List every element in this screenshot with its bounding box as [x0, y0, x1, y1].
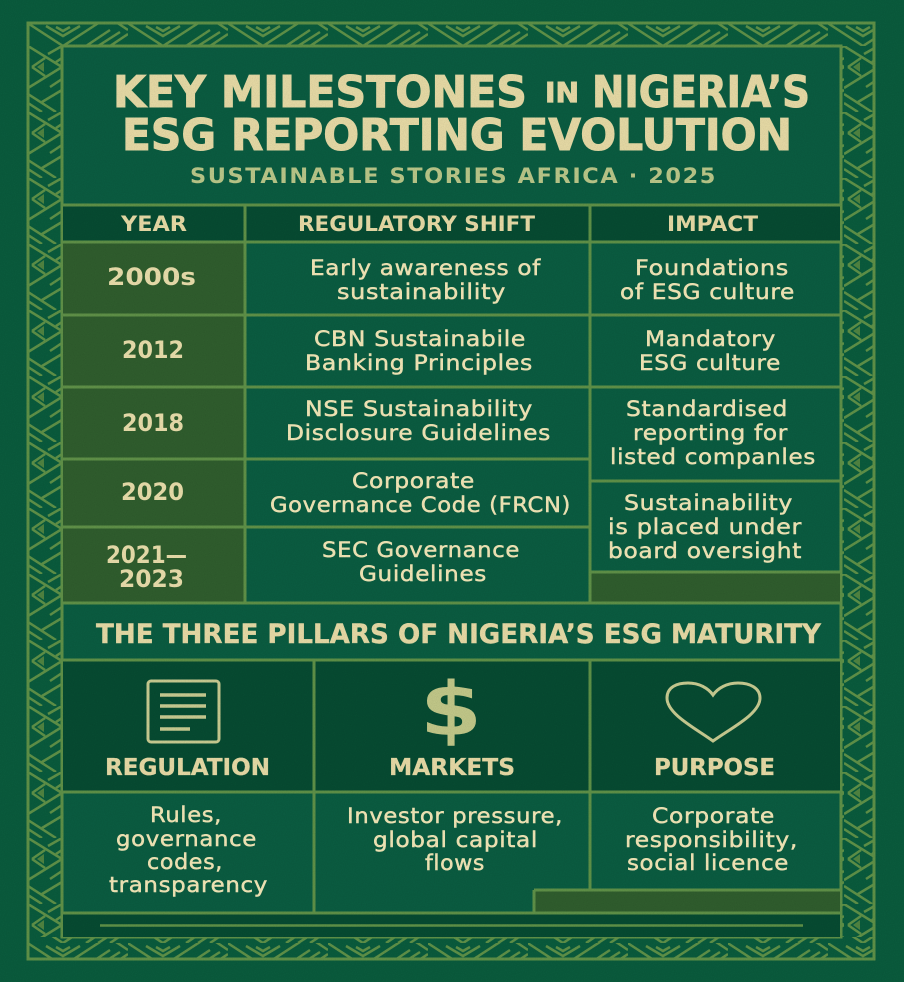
regulatory shift column: Guidelines — [359, 562, 487, 586]
year column cells: 2000s — [107, 263, 196, 291]
regulatory shift column: Disclosure Guidelines — [286, 421, 551, 445]
impact column: listed companles — [610, 445, 816, 469]
regulation description — [109, 803, 268, 897]
title block — [113, 67, 810, 188]
markets description: flows — [425, 851, 485, 875]
regulatory shift column: Governance Code (FRCN) — [270, 493, 571, 517]
section heading: three pillars: THE THREE PILLARS OF NIGERIA’S ESG MATURITY — [96, 619, 821, 650]
regulation label: REGULATION — [105, 755, 270, 781]
table header row — [63, 206, 840, 242]
regulatory shift column: Early awareness of — [310, 256, 541, 280]
regulatory shift column: Banking Principles — [305, 351, 533, 375]
pillar: regulation — [105, 681, 270, 897]
icon: heart — [667, 683, 760, 741]
impact column — [591, 256, 840, 603]
impact column: reporting for — [633, 421, 788, 445]
title line 1 — [113, 67, 810, 118]
year column cells: 2018 — [122, 409, 184, 437]
year column cells: 2012 — [122, 336, 184, 364]
icon: document — [148, 681, 219, 742]
impact column: Mandatory — [645, 327, 776, 351]
regulation description: codes, — [147, 850, 223, 874]
year column cells: 2020 — [121, 478, 184, 506]
markets description: Investor pressure, — [347, 804, 563, 828]
pillar: purpose — [625, 683, 798, 875]
milestones table — [63, 206, 840, 603]
regulatory shift column: CBN Sustainabile — [314, 327, 526, 351]
impact column: of ESG culture — [620, 280, 795, 304]
regulation description: Rules, — [150, 803, 222, 827]
regulation description: governance — [116, 827, 257, 851]
impact column: board oversight — [608, 539, 802, 563]
impact column: Standardised — [626, 397, 788, 421]
purpose label: PURPOSE — [654, 755, 775, 781]
purpose description: social licence — [627, 851, 789, 875]
impact column: ESG culture — [639, 351, 781, 375]
purpose description: Corporate — [652, 804, 775, 828]
impact column: Sustainability — [624, 491, 793, 515]
title line 2: ESG REPORTING EVOLUTION — [122, 110, 792, 161]
regulatory shift column: Corporate — [352, 469, 475, 493]
impact column: is placed under — [608, 515, 802, 539]
impact column: Foundations — [635, 256, 789, 280]
markets label: MARKETS — [389, 755, 515, 781]
year column cells — [63, 243, 244, 603]
year column cells: 2021— — [106, 541, 187, 569]
table header row: IMPACT — [667, 212, 759, 236]
title line 1: KEY MILESTONES — [113, 67, 527, 118]
table grid lines — [62, 205, 841, 913]
table header row: REGULATORY SHIFT — [298, 212, 536, 236]
purpose description: responsibility, — [625, 828, 798, 852]
table header row: YEAR — [120, 212, 187, 236]
regulatory shift column: sustainability — [337, 280, 506, 304]
regulatory shift column: SEC Governance — [322, 538, 520, 562]
title line 1: NIGERIA’S — [592, 67, 810, 118]
icon: dollar sign: $ — [420, 667, 482, 753]
pillar: markets — [347, 667, 563, 875]
pillar header backgrounds — [63, 661, 840, 792]
year column cells: 2023 — [119, 565, 184, 593]
markets description — [347, 804, 563, 875]
regulation description: transparency — [109, 873, 268, 897]
markets description: global capital — [373, 828, 538, 852]
purpose description — [625, 804, 798, 875]
regulatory shift column: NSE Sustainability — [305, 397, 533, 421]
title line 1: IN — [545, 76, 579, 109]
subtitle: SUSTAINABLE STORIES AFRICA · 2025 — [190, 164, 717, 188]
footer band — [63, 890, 840, 937]
regulatory shift column — [270, 256, 571, 586]
